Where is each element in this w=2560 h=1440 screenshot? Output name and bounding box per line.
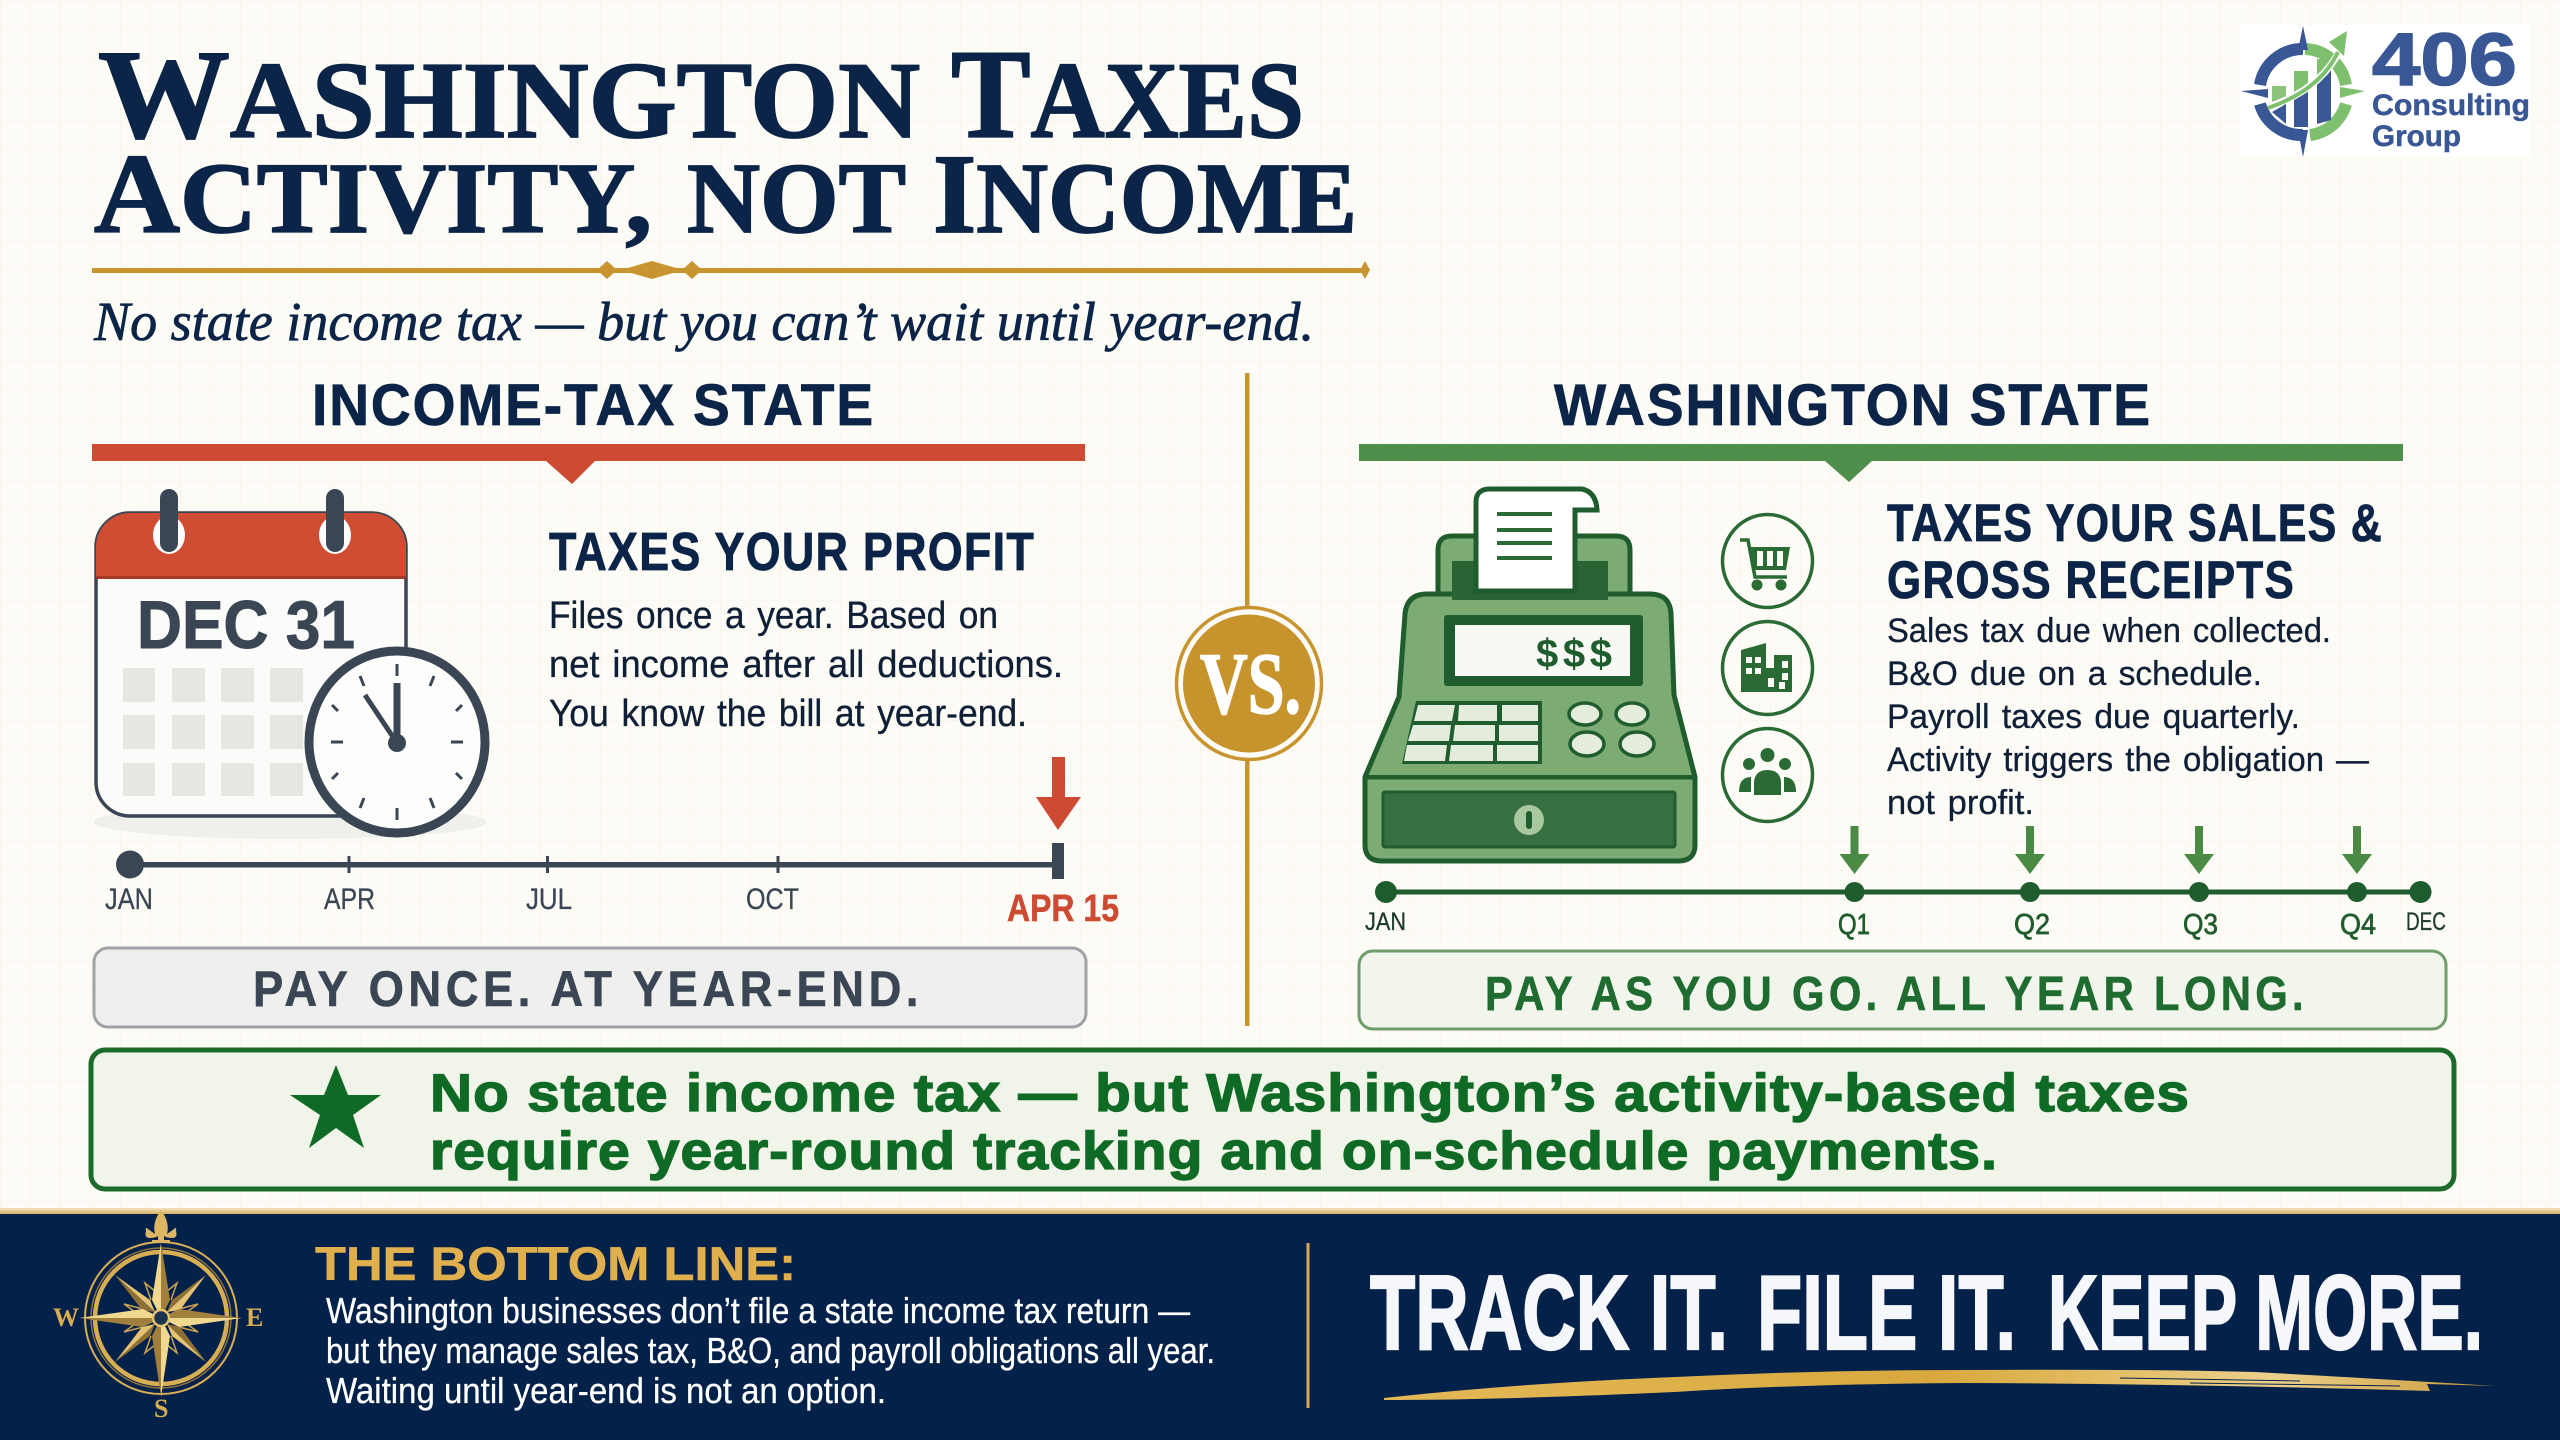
title: INCOME (933, 132, 1357, 257)
callout: pay as you go (1359, 951, 2446, 1029)
text: taxes your sales and gross receipts: GROSS RECEIPTS (1887, 551, 2295, 610)
text: the bottom line (315, 1237, 1215, 1411)
logo: 406 Consulting Group (2240, 18, 2530, 157)
timeline: once a year: APR 15 (1007, 888, 1119, 930)
banner text: require year-round tracking and on-schedule payments. (430, 1122, 1998, 1181)
green header bar (1359, 444, 2403, 482)
icon: shopping cart (1722, 514, 1812, 608)
logo: 406 Consulting Group: 406 (2372, 18, 2517, 101)
text: taxes your sales and gross receipts: Sales tax due when collected. (1887, 612, 2331, 650)
secondary rays (124, 1283, 198, 1353)
title: TAXES (951, 25, 1304, 165)
callout: pay once: PAY ONCE. AT YEAR-END. (253, 961, 923, 1017)
footer band (0, 1208, 2560, 1440)
text: taxes your profit: net income after all deductions. (549, 644, 1063, 686)
arrows: quarterly payments (1840, 826, 2372, 874)
text: the bottom line: but they manage sales tax, B&O, and payroll obligations all year. (326, 1330, 1215, 1371)
icon: cash register (1365, 489, 1695, 861)
icon: compass rose (53, 1210, 263, 1423)
heading: income-tax state: INCOME-TAX STATE (312, 373, 875, 438)
arrow: april deadline (1036, 757, 1081, 830)
timeline: once a year: APR (324, 883, 375, 916)
text: the bottom line: Waiting until year-end is not an option. (326, 1370, 886, 1411)
callout: pay once (94, 948, 1086, 1027)
icon: calendar with clock: DEC 31 (137, 587, 355, 663)
slogan: FILE IT. (1757, 1254, 2016, 1372)
text: taxes your sales and gross receipts: Payroll taxes due quarterly. (1887, 698, 2300, 736)
timeline: quarterly: Q2 (2014, 909, 2050, 941)
red header bar (92, 444, 1085, 484)
text: taxes your profit: TAXES YOUR PROFIT (549, 522, 1035, 582)
icon: cash register: $$$ (1536, 632, 1612, 676)
logo: 406 Consulting Group: Group (2372, 120, 2461, 153)
icon: calendar with clock (93, 489, 487, 839)
text: taxes your profit: You know the bill at year-end. (549, 693, 1027, 735)
timeline: once a year: JUL (526, 883, 572, 916)
fleur-de-lis (146, 1210, 176, 1243)
icon: people (1722, 728, 1812, 822)
slogan: TRACK IT. (1370, 1254, 1728, 1372)
badge: vs.: VS. (1200, 636, 1301, 733)
center divider (1245, 373, 1250, 1026)
title: NOT (687, 142, 906, 254)
title: ACTIVITY, (94, 132, 652, 257)
panel: washington state (1359, 373, 2446, 1029)
timeline: once a year (105, 843, 1119, 930)
text: taxes your sales and gross receipts: TAXES YOUR SALES & (1887, 494, 2383, 553)
timeline: quarterly: Q1 (1838, 909, 1870, 941)
logo: 406 Consulting Group: Consulting (2372, 89, 2530, 122)
slogan (1370, 1254, 2483, 1372)
timeline: quarterly: DEC (2406, 908, 2446, 936)
callout: pay as you go: PAY AS YOU GO. ALL YEAR LONG. (1485, 968, 2308, 1021)
title (94, 25, 1357, 257)
icon: compass rose: S (154, 1394, 168, 1423)
text: taxes your sales and gross receipts: B&O due on a schedule. (1887, 655, 2262, 693)
icon: star (290, 1065, 381, 1148)
text: taxes your sales and gross receipts: not profit. (1887, 784, 2034, 822)
icon: compass rose: W (53, 1303, 79, 1332)
title: WASHINGTON (98, 25, 920, 165)
icon: buildings (1722, 622, 1812, 714)
text: taxes your profit: Files once a year. Based on (549, 595, 998, 637)
timeline: quarterly: Q3 (2183, 909, 2218, 941)
icon: compass rose: E (246, 1303, 263, 1332)
title divider (92, 261, 1370, 279)
timeline: quarterly: JAN (1365, 908, 1406, 936)
timeline: once a year: JAN (105, 883, 153, 916)
badge: vs. (1176, 608, 1322, 760)
text: the bottom line: Washington businesses don’t file a state income tax return — (326, 1290, 1190, 1331)
text: taxes your profit (549, 522, 1063, 735)
timeline: quarterly (1365, 881, 2446, 941)
text: taxes your sales and gross receipts (1887, 494, 2383, 822)
panel: income-tax state (92, 373, 1119, 1027)
text: the bottom line: THE BOTTOM LINE: (315, 1237, 796, 1290)
footer divider (1306, 1243, 1310, 1408)
banner text: No state income tax — but Washington’s activity-based taxes (430, 1064, 2190, 1123)
gold brush stroke (1384, 1370, 2495, 1400)
heading: washington state: WASHINGTON STATE (1554, 373, 2152, 438)
timeline: quarterly: Q4 (2340, 909, 2376, 941)
subtitle: No state income tax — but you can’t wait until year-end. (93, 291, 1314, 352)
banner text (430, 1064, 2190, 1181)
banner: no state income tax (91, 1050, 2454, 1189)
timeline: once a year: OCT (746, 883, 799, 916)
text: taxes your sales and gross receipts: Activity triggers the obligation — (1887, 741, 2369, 779)
